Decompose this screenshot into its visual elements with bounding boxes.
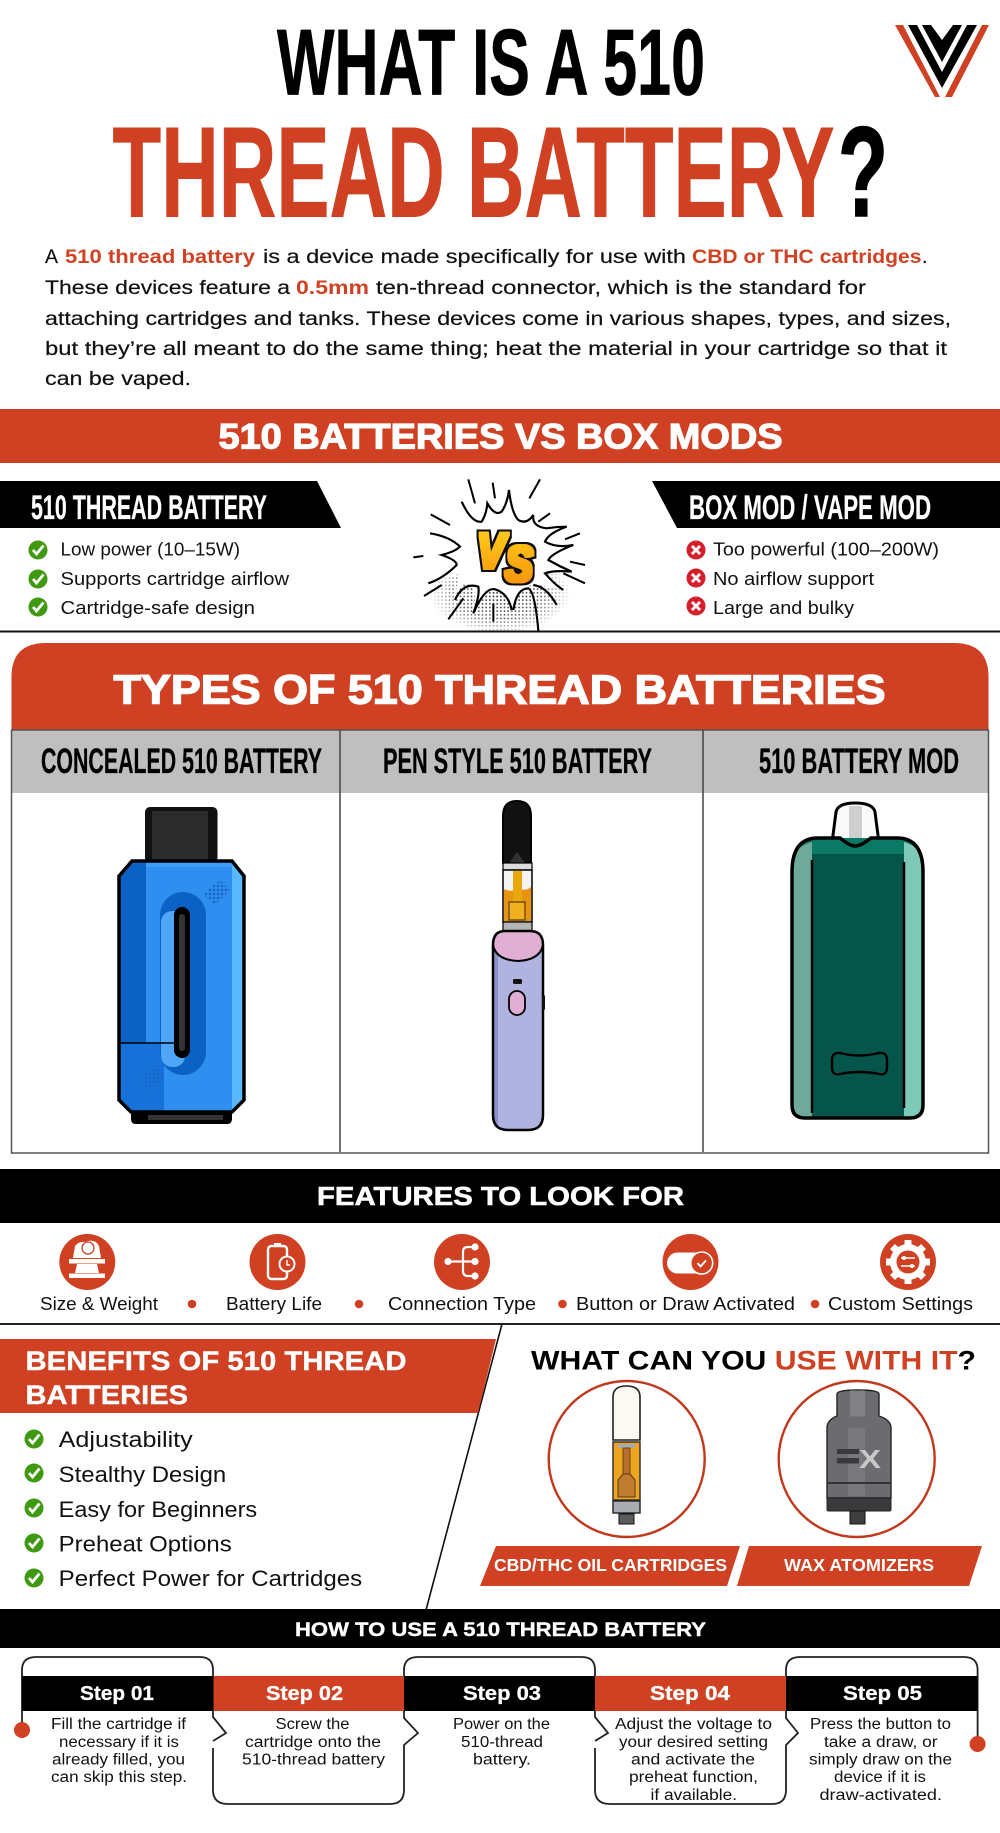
benefit: adjustability: [24, 1427, 193, 1452]
feature: button or draw activated: [576, 1234, 795, 1314]
banner: 510 batteries vs box mods: [0, 409, 1000, 463]
panel: 510 thread battery: [0, 481, 341, 618]
step 04: [595, 1676, 786, 1804]
icon: wax atomizer: [779, 1381, 935, 1537]
badge: cbd/thc oil cartridges: CBD/THC OIL CARTRIDGES: [494, 1555, 727, 1575]
label: custom settings: Custom Settings: [828, 1294, 973, 1314]
icon: oil cartridge: [549, 1381, 705, 1537]
step 05: simply draw on the: [809, 1752, 952, 1768]
benefit: adjustability: Adjustability: [59, 1427, 193, 1452]
intro paragraph: A: [45, 246, 58, 268]
benefit: preheat options: Preheat Options: [59, 1532, 232, 1556]
step 05: draw-activated.: [820, 1787, 942, 1804]
icon: wax atomizer: X: [859, 1444, 882, 1474]
icon: blue concealed battery: [119, 807, 244, 1124]
icon: green battery mod: [792, 803, 923, 1118]
logo: [895, 25, 989, 97]
bullet: [355, 1300, 363, 1308]
panel: box mod / vape mod: [652, 481, 1000, 618]
banner: how to use: HOW TO USE A 510 THREAD BATTERY: [295, 1619, 706, 1641]
step 01: can skip this step.: [51, 1769, 187, 1786]
banner: features to look for: FEATURES TO LOOK FOR: [317, 1183, 684, 1211]
bullet: [811, 1300, 819, 1308]
step 02: Step 02: [266, 1683, 343, 1705]
step 04: Step 04: [650, 1683, 731, 1705]
benefits heading: [0, 1339, 496, 1413]
intro paragraph: These devices feature a: [45, 277, 290, 299]
list item: large and bulky: Large and bulky: [713, 597, 855, 618]
badge: cbd/thc oil cartridges: [480, 1546, 740, 1586]
step 04: and activate the: [631, 1752, 755, 1768]
icon: gear: [880, 1234, 936, 1290]
step 03: battery.: [473, 1752, 531, 1768]
benefits heading: BENEFITS OF 510 THREAD: [26, 1346, 406, 1376]
feature: battery life: [226, 1234, 322, 1314]
panel: what can you use with it: [480, 1346, 982, 1586]
step 03: Power on the: [453, 1716, 550, 1733]
feature: size and weight: [40, 1234, 158, 1314]
benefit: easy for beginners: Easy for Beginners: [59, 1497, 257, 1522]
intro paragraph: ten-thread connector, which is the standard for: [376, 277, 867, 299]
step 03: [404, 1676, 595, 1768]
benefit: perfect power: Perfect Power for Cartridges: [59, 1566, 362, 1591]
list item: too powerful: Too powerful (100–200W): [713, 538, 939, 560]
step 01: [22, 1676, 214, 1786]
icon: vs burst: [413, 479, 587, 633]
intro paragraph: [45, 246, 951, 390]
feature: custom settings: [828, 1234, 973, 1314]
bullet: [188, 1300, 196, 1308]
panel: benefits: [0, 1339, 496, 1591]
step 05: Press the button to: [810, 1716, 951, 1733]
step 05: [786, 1676, 978, 1804]
label: battery life: Battery Life: [226, 1294, 322, 1314]
step 01: necessary if it is: [59, 1734, 179, 1751]
step 04: Adjust the voltage to: [615, 1716, 772, 1733]
step 02: Screw the: [276, 1716, 350, 1733]
icon: pen style battery: [493, 801, 545, 1130]
list item: cartridge-safe: Cartridge-safe design: [60, 597, 255, 618]
heading: 510 thread battery: [0, 481, 341, 528]
step 04: your desired setting: [619, 1734, 768, 1751]
step 05: take a draw, or: [824, 1734, 938, 1751]
intro paragraph: but they’re all meant to do the same thing; heat the material in your cartridge so that it: [45, 338, 948, 360]
steps timeline: [14, 1657, 986, 1804]
icon: scale and tape: [59, 1234, 115, 1290]
banner: how to use: [0, 1609, 1000, 1648]
banner: 510 batteries vs box mods: 510 BATTERIES VS BOX MODS: [218, 418, 782, 456]
step 01: Fill the cartridge if: [51, 1716, 187, 1733]
list item: no airflow: No airflow support: [713, 568, 874, 589]
step 03: 510-thread: [461, 1734, 543, 1751]
types heading: TYPES OF 510 THREAD BATTERIES: [114, 666, 886, 712]
step 02: 510-thread battery: [242, 1752, 385, 1768]
intro paragraph: .: [922, 246, 927, 268]
intro paragraph: CBD or THC cartridges: [692, 246, 922, 268]
icon: vs burst: S: [505, 536, 533, 592]
step 03: Step 03: [463, 1683, 541, 1705]
feature: connection type: [388, 1234, 536, 1314]
step 01: Step 01: [80, 1683, 154, 1705]
badge: wax atomizers: WAX ATOMIZERS: [784, 1555, 934, 1575]
step 02: [214, 1676, 404, 1768]
list item: low power: Low power (10–15W): [60, 538, 240, 560]
intro paragraph: can be vaped.: [45, 368, 191, 390]
label: size and weight: Size & Weight: [40, 1294, 158, 1314]
icon: battery with clock: [250, 1234, 306, 1290]
intro paragraph: 510 thread battery: [65, 246, 255, 268]
panel: types of 510 thread batteries: [12, 643, 988, 1153]
icon: connection tree: [434, 1234, 490, 1290]
label: button or draw activated: Button or Draw Activated: [576, 1294, 795, 1314]
use-with heading: WHAT CAN YOU USE WITH IT ?: [531, 1346, 976, 1376]
list item: airflow: Supports cartridge airflow: [60, 568, 290, 589]
intro paragraph: is a device made specifically for use with: [263, 246, 686, 268]
intro paragraph: 0.5mm: [296, 277, 369, 299]
step 05: device if it is: [834, 1769, 926, 1786]
label: connection type: Connection Type: [388, 1294, 536, 1314]
step 02: cartridge onto the: [245, 1734, 381, 1751]
step 05: Step 05: [843, 1683, 922, 1705]
benefits heading: BATTERIES: [26, 1380, 188, 1410]
types heading: [12, 643, 988, 730]
bullet: [558, 1300, 567, 1308]
step 04: if available.: [650, 1787, 737, 1804]
banner: features to look for: [0, 1169, 1000, 1223]
title: [112, 9, 888, 244]
icon: vs burst: V: [477, 523, 510, 579]
intro paragraph: attaching cartridges and tanks. These devices come in various shapes, types, and sizes,: [45, 308, 951, 330]
badge: wax atomizers: [737, 1546, 982, 1586]
step 01: already filled, you: [52, 1752, 185, 1768]
step 04: preheat function,: [629, 1769, 758, 1786]
benefit: stealthy design: Stealthy Design: [59, 1462, 226, 1487]
icon: toggle: [662, 1234, 718, 1290]
